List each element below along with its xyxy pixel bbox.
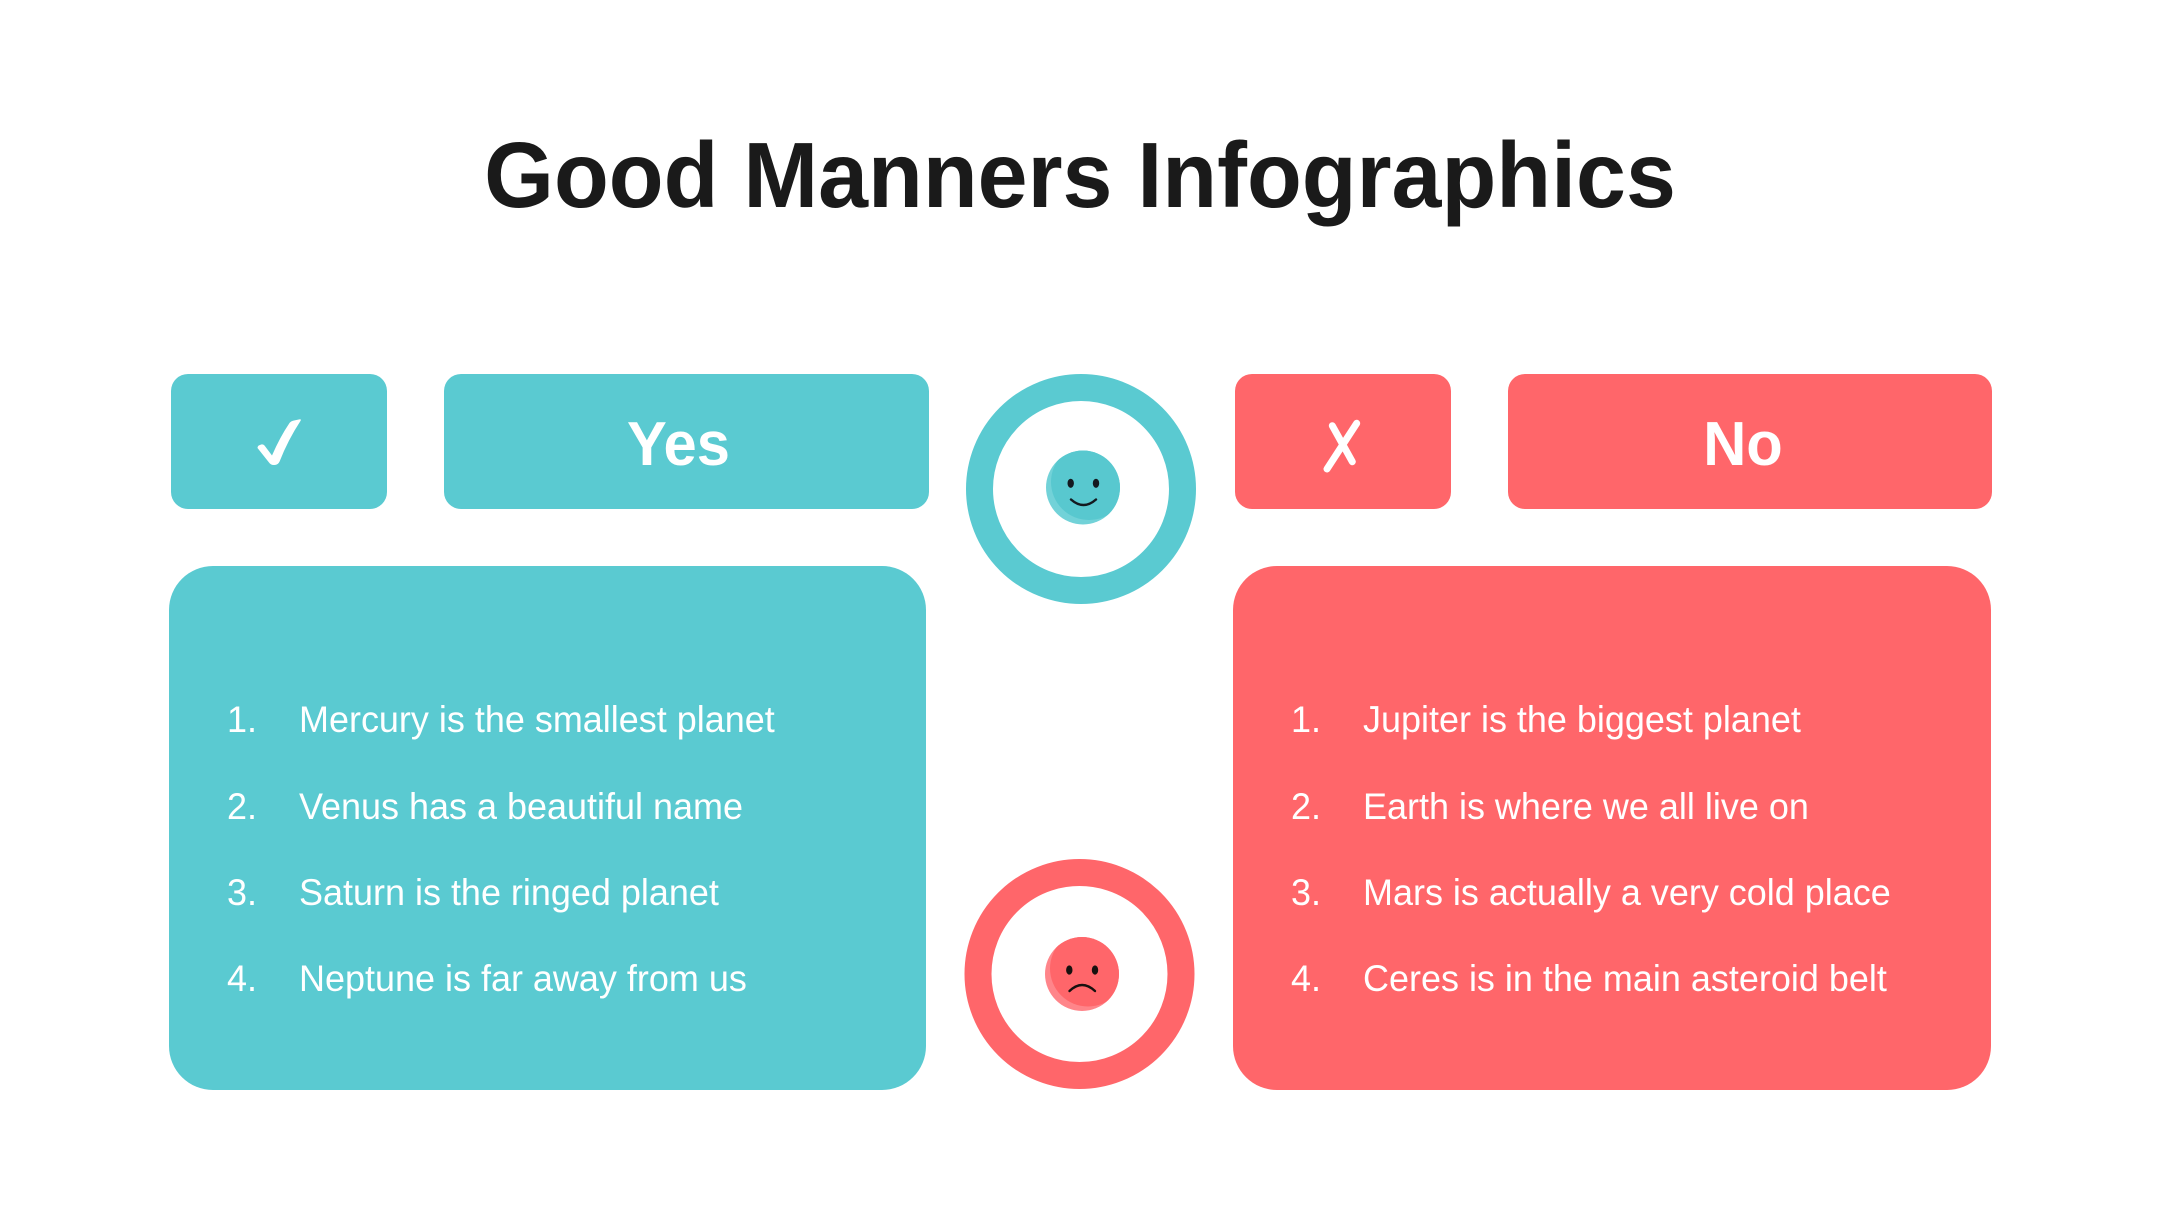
list item 1: Jupiter is the biggest planet <box>1363 698 1801 740</box>
list item 2: 2. <box>227 784 257 826</box>
list item 2: Venus has a beautiful name <box>299 784 743 826</box>
list item 4: 4. <box>227 957 257 999</box>
icons: emoji rings <box>964 374 1196 1089</box>
heading: Yes: Yes <box>627 408 730 478</box>
icon: smiling face ring <box>980 388 1182 590</box>
list item 3: 3. <box>227 871 257 913</box>
list item 1: 1. <box>227 698 257 740</box>
list item 2: Earth is where we all live on <box>1363 784 1809 826</box>
list item 1: 1. <box>1291 698 1321 740</box>
list item 4: Ceres is in the main asteroid belt <box>1363 957 1887 999</box>
icon box: check mark <box>171 374 387 509</box>
list item 3: 3. <box>1291 871 1321 913</box>
list item 1: Mercury is the smallest planet <box>299 698 775 740</box>
panel: no list <box>1233 566 1991 1090</box>
heading: No: No <box>1703 408 1783 478</box>
list item 3: Mars is actually a very cold place <box>1363 871 1891 913</box>
heading: No <box>1508 374 1992 509</box>
title: Good Manners Infographics <box>484 123 1676 227</box>
list item 3: Saturn is the ringed planet <box>299 871 719 913</box>
list item 4: Neptune is far away from us <box>299 957 747 999</box>
panel: yes list <box>169 566 926 1090</box>
icon box: cross mark <box>1235 374 1451 509</box>
list item 2: 2. <box>1291 784 1321 826</box>
icon: sad face ring <box>978 872 1181 1076</box>
heading: Yes <box>444 374 929 509</box>
list item 4: 4. <box>1291 957 1321 999</box>
